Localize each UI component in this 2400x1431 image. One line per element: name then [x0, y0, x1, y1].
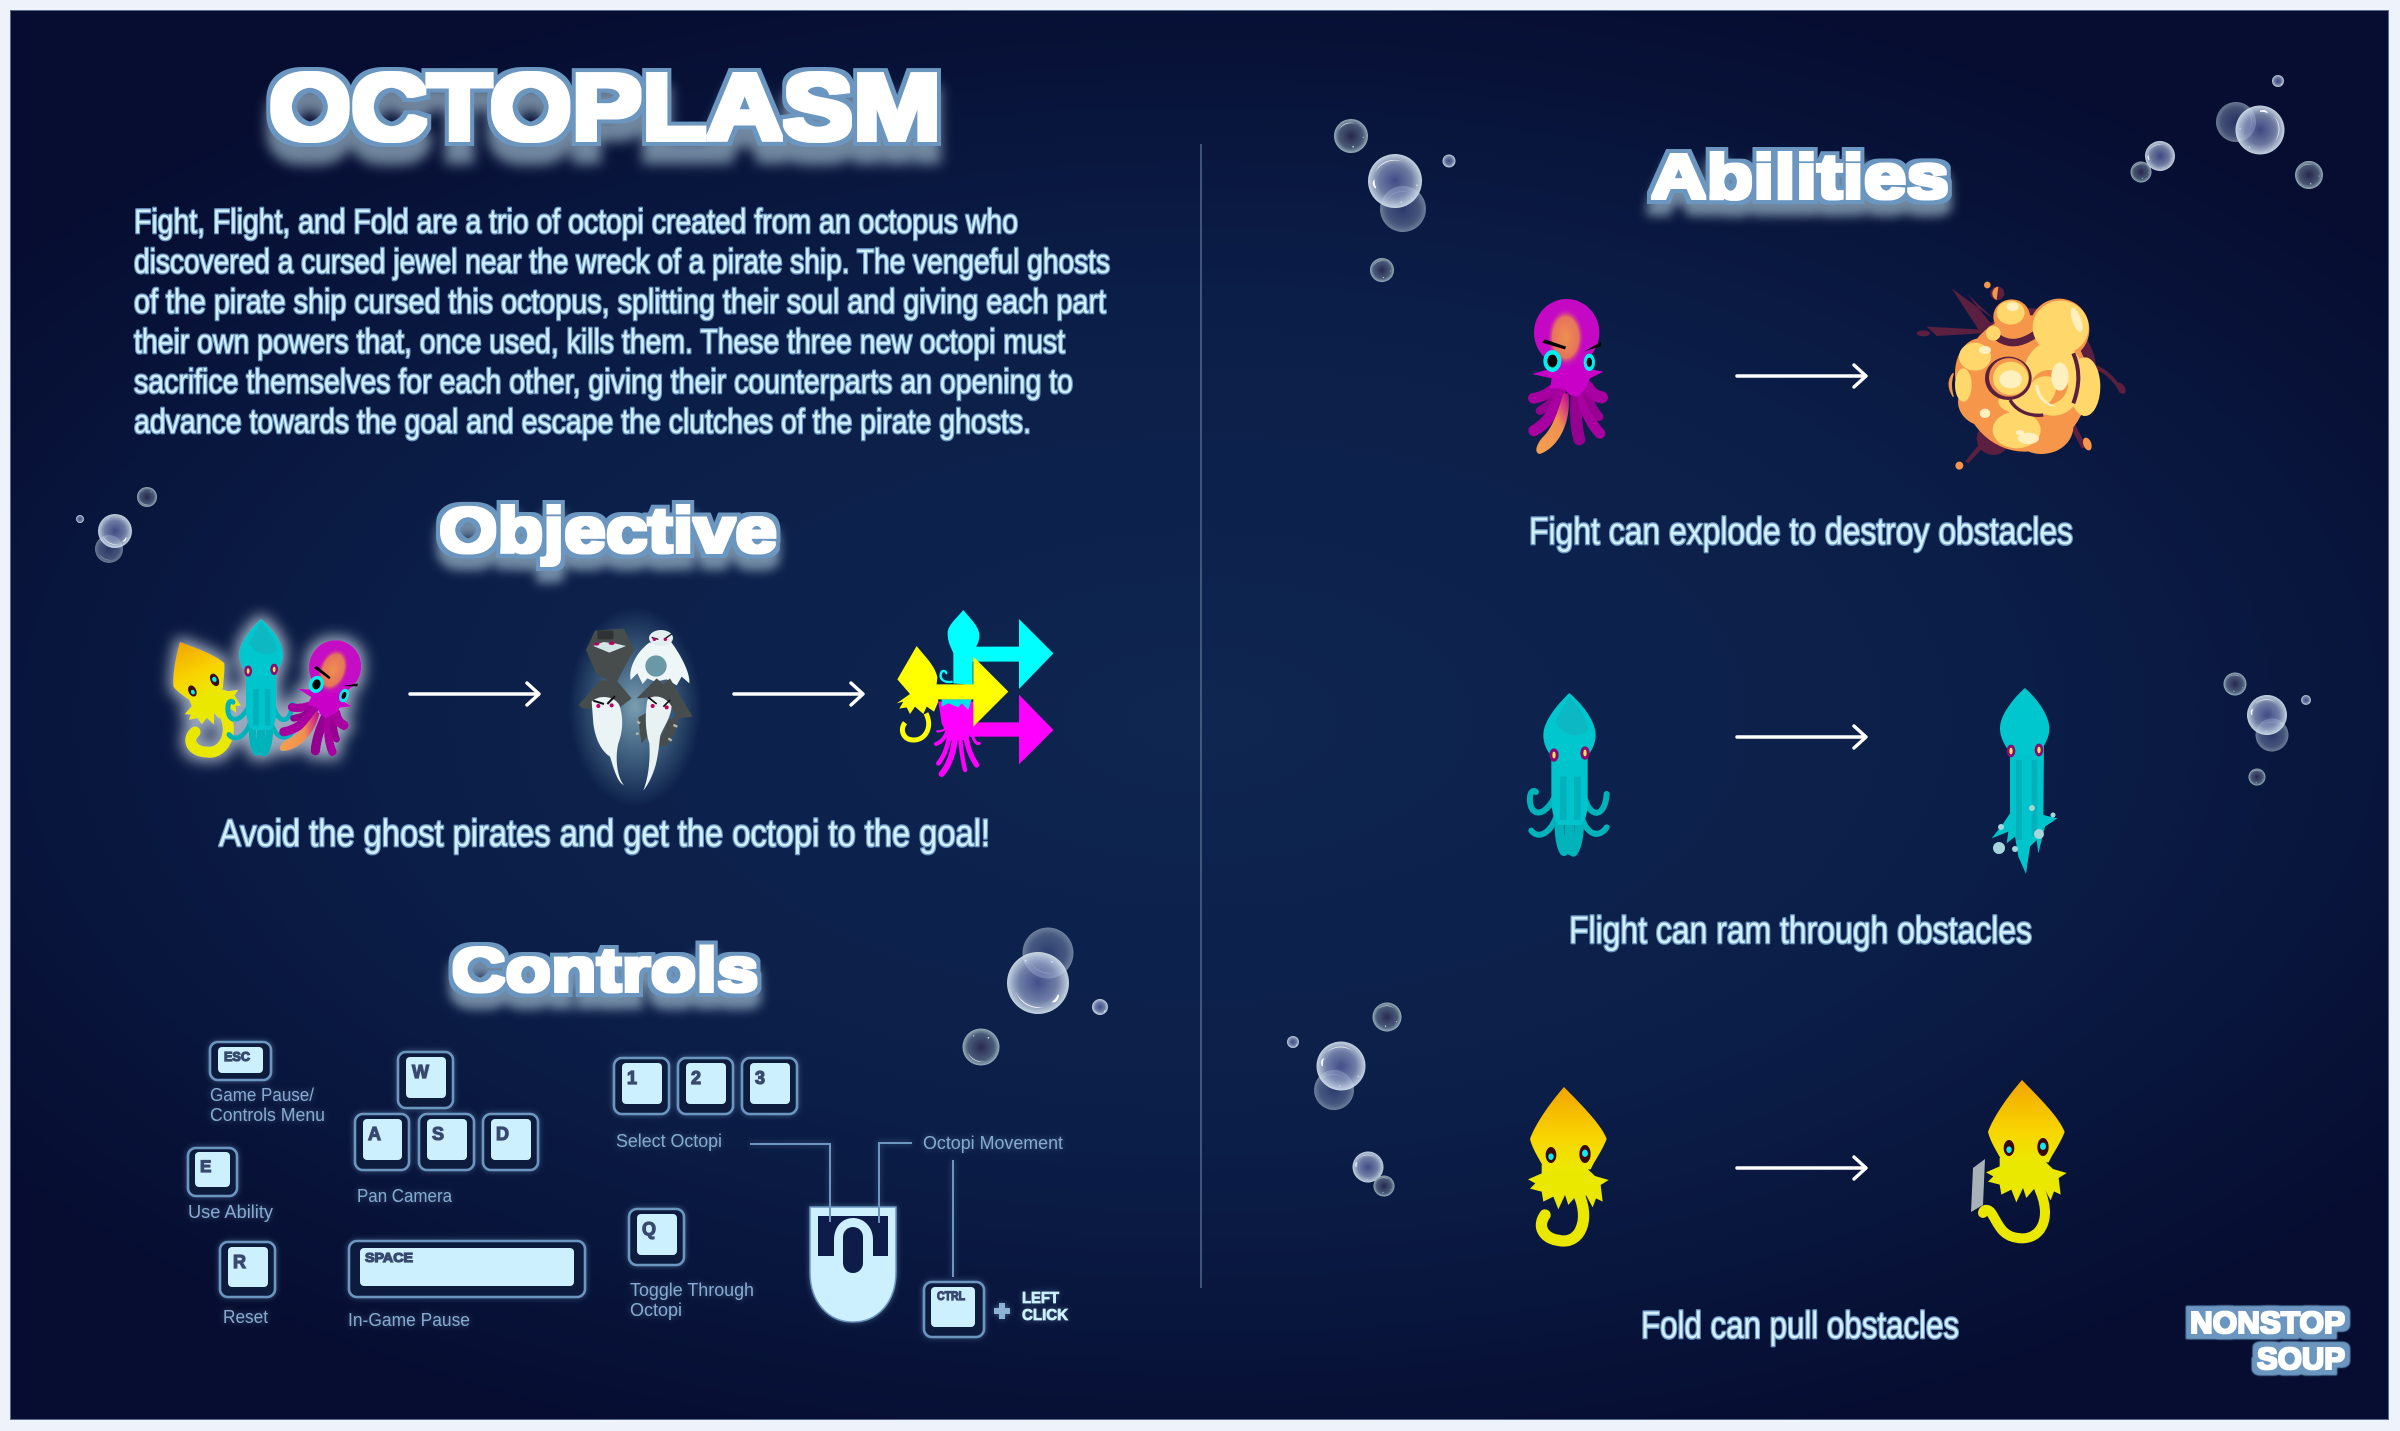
key: R: R	[233, 1252, 246, 1272]
magenta silhouette and arrow	[936, 695, 1053, 774]
label: pan camera: Pan Camera	[357, 1186, 453, 1206]
story paragraph: of the pirate ship cursed this octopus, splitting their soul and giving each part	[134, 283, 1106, 321]
arrow: octopi to ghosts	[410, 683, 539, 705]
bubbles: abilities top right	[2126, 75, 2329, 195]
arrow: flight ability	[1737, 726, 1866, 748]
bubbles: controls	[962, 928, 1108, 1066]
story paragraph	[134, 203, 1110, 441]
illustration: explosion	[1917, 282, 2128, 470]
label: game pause	[210, 1085, 325, 1125]
octopus: Fight	[276, 632, 372, 768]
ghost lower right	[636, 678, 693, 791]
key: 3: 3	[755, 1068, 765, 1088]
octopus: Fight	[1532, 299, 1603, 454]
label: octopi movement: Octopi Movement	[923, 1133, 1063, 1153]
connector: select octopi to mouse	[750, 1144, 830, 1222]
key: D: D	[496, 1124, 509, 1144]
ghost top right	[630, 630, 689, 685]
heading: controls: Controls	[452, 936, 758, 1004]
key: D	[483, 1114, 538, 1170]
key: Q: Q	[642, 1219, 656, 1239]
bubbles: middle right	[2219, 668, 2311, 789]
title: OCTOPLASM	[269, 55, 941, 159]
key: 1: 1	[627, 1068, 637, 1088]
label: game pause: Game Pause/	[210, 1085, 314, 1105]
arrow: fight ability	[1737, 365, 1866, 387]
label: select octopi: Select Octopi	[616, 1131, 722, 1151]
key: S: S	[432, 1124, 444, 1144]
logo: nonstop soup: SOUP	[2257, 1341, 2345, 1376]
label: left click	[1022, 1290, 1068, 1324]
illustration: ghost pirates	[568, 607, 702, 807]
bubbles: abilities left	[1327, 112, 1456, 287]
label: game pause: Controls Menu	[210, 1105, 325, 1125]
key: space: SPACE	[365, 1250, 413, 1265]
caption: objective: Avoid the ghost pirates and get the octopi to the goal!	[219, 813, 990, 855]
logo: nonstop soup: NONSTOP	[2190, 1305, 2345, 1340]
illustration: octopi silhouettes with goal arrows	[897, 610, 1053, 774]
bubbles: left edge	[76, 487, 157, 563]
key: 2	[678, 1058, 733, 1114]
caption: fight ability: Fight can explode to destroy obstacles	[1529, 511, 2073, 553]
heading: objective: Objective	[439, 496, 777, 566]
yellow silhouette and arrow	[897, 646, 1008, 740]
ghost top left	[586, 629, 634, 685]
key: 3	[742, 1058, 797, 1114]
octopus: Fold	[156, 628, 247, 752]
key: CTRL	[924, 1282, 984, 1337]
ghost lower left	[578, 680, 632, 785]
icon: plus	[994, 1303, 1010, 1319]
story paragraph: their own powers that, once used, kills them. These three new octopi must	[134, 323, 1065, 361]
key: W: W	[412, 1062, 429, 1082]
label: use ability: Use Ability	[188, 1202, 273, 1222]
label: in-game pause: In-Game Pause	[348, 1310, 470, 1330]
cyan silhouette and arrow	[941, 610, 1053, 689]
arrow: fold ability	[1737, 1157, 1866, 1179]
story paragraph: Fight, Flight, and Fold are a trio of octopi created from an octopus who	[134, 203, 1018, 241]
key: R	[220, 1242, 275, 1297]
key: Q	[629, 1209, 684, 1265]
key: E	[188, 1148, 237, 1196]
connector: octopi movement to mouse	[879, 1143, 912, 1223]
cyan fringe	[942, 699, 972, 710]
story paragraph: sacrifice themselves for each other, giving their counterparts an opening to	[134, 363, 1073, 401]
label: toggle through octopi	[630, 1280, 754, 1320]
illustration: three octopi group	[156, 619, 372, 768]
caption: fold ability: Fold can pull obstacles	[1641, 1305, 1959, 1347]
heading: abilities: Abilities	[1651, 143, 1949, 212]
key: S	[419, 1114, 474, 1170]
caption: flight ability: Flight can ram through obstacles	[1569, 910, 2032, 952]
label: left click: LEFT	[1022, 1290, 1059, 1307]
arrow: ghosts to goal	[734, 683, 863, 705]
key: W	[398, 1052, 453, 1108]
octopus: Flight	[228, 619, 292, 753]
key: 2: 2	[691, 1068, 701, 1088]
key: 1	[614, 1058, 669, 1114]
bubbles: middle divider	[1287, 997, 1407, 1200]
octopus: Fold pulling	[1971, 1080, 2067, 1238]
label: reset: Reset	[223, 1307, 268, 1327]
key: space	[349, 1241, 585, 1297]
label: toggle through octopi: Octopi	[630, 1300, 682, 1320]
label: left click: CLICK	[1022, 1307, 1068, 1324]
key: ESC	[210, 1042, 271, 1080]
key: CTRL: CTRL	[937, 1289, 965, 1303]
octopus: Flight ramming	[1992, 688, 2057, 874]
connector: movement to ctrl	[952, 1160, 954, 1277]
story paragraph: discovered a cursed jewel near the wreck of a pirate ship. The vengeful ghosts	[134, 243, 1110, 281]
controls diagram	[188, 1042, 1068, 1337]
story paragraph: advance towards the goal and escape the clutches of the pirate ghosts.	[134, 403, 1031, 441]
key: ESC: ESC	[224, 1050, 250, 1064]
key: A	[355, 1114, 409, 1170]
octopus: Fold	[1528, 1087, 1609, 1241]
logo: nonstop soup	[2190, 1305, 2345, 1376]
label: toggle through octopi: Toggle Through	[630, 1280, 754, 1300]
icon: mouse	[810, 1207, 896, 1322]
key: A: A	[368, 1124, 381, 1144]
octopus: Flight	[1530, 693, 1607, 852]
key: E: E	[200, 1157, 211, 1176]
